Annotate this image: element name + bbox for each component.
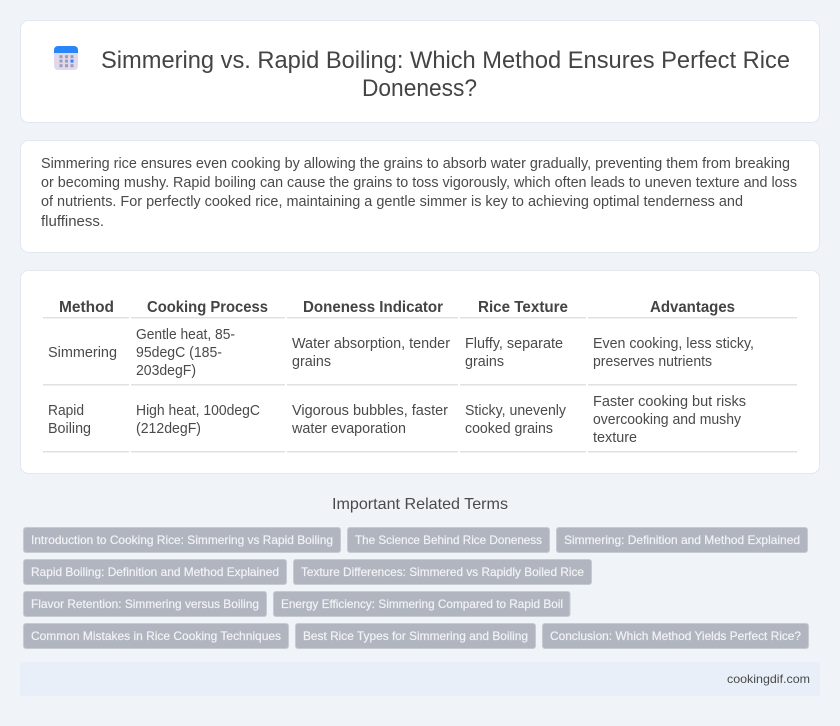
related terms tags: Introduction to Cooking Rice: Simmering vs Rapid Boiling	[31, 533, 333, 547]
table row: rapid boiling: Boiling	[48, 421, 91, 437]
intro panel	[20, 140, 820, 252]
icon: calendar	[54, 46, 78, 70]
table row: rapid boiling: Rapid	[48, 403, 84, 419]
intro paragraph	[41, 156, 797, 230]
table row: simmering: Even cooking, less sticky,	[593, 336, 754, 352]
table row: simmering: Gentle heat, 85-	[136, 327, 235, 343]
table header row: Doneness Indicator	[303, 299, 443, 316]
intro paragraph: or becoming mushy. Rapid boiling can cause the grains to toss vigorously, which often leads to uneven texture and loss	[41, 175, 797, 191]
header panel	[20, 20, 820, 122]
table row: simmering	[43, 327, 797, 386]
table row: simmering: 203degF)	[136, 363, 196, 379]
comparison table panel	[20, 270, 820, 474]
related terms tags: Texture Differences: Simmered vs Rapidly Boiled Rice	[301, 565, 584, 579]
related terms tags: Energy Efficiency: Simmering Compared to Rapid Boil	[281, 597, 563, 611]
related terms tags: Flavor Retention: Simmering versus Boiling	[31, 597, 259, 611]
table row: rapid boiling: cooked grains	[465, 421, 553, 437]
related terms tags: Rapid Boiling: Definition and Method Explained	[31, 565, 279, 579]
table row: rapid boiling: (212degF)	[136, 421, 201, 437]
related terms tags: The Science Behind Rice Doneness	[355, 533, 542, 547]
intro paragraph: Simmering rice ensures even cooking by allowing the grains to absorb water gradually, preventing them from breaking	[41, 156, 790, 172]
related terms tags: Best Rice Types for Simmering and Boiling	[303, 629, 528, 643]
intro paragraph: of nutrients. For perfectly cooked rice, maintaining a gentle simmer is key to achieving optimal tenderness and	[41, 194, 743, 210]
table row: simmering: Water absorption, tender	[292, 336, 450, 352]
table row: rapid boiling: overcooking and mushy	[593, 412, 742, 428]
title: Doneness?	[362, 75, 477, 102]
table row: rapid boiling: Sticky, unevenly	[465, 403, 567, 419]
related terms tags: Simmering: Definition and Method Explained	[564, 533, 800, 547]
related terms heading: Important Related Terms	[332, 496, 508, 513]
table row: simmering: preserves nutrients	[593, 354, 712, 370]
table row: simmering: 95degC (185-	[136, 345, 222, 361]
table header row: Method	[59, 299, 114, 316]
footer bar: cookingdif.com	[727, 672, 810, 686]
table row: rapid boiling: High heat, 100degC	[136, 403, 260, 419]
table row: rapid boiling: Faster cooking but risks	[593, 394, 746, 410]
table header row: Cooking Process	[147, 299, 268, 316]
footer bar	[20, 662, 820, 696]
table row: rapid boiling: water evaporation	[291, 421, 406, 437]
table row: rapid boiling: texture	[593, 430, 637, 446]
table row: simmering: grains	[465, 354, 504, 370]
title: Simmering vs. Rapid Boiling: Which Method Ensures Perfect Rice	[101, 47, 790, 74]
table row: simmering: grains	[292, 354, 331, 370]
table row: simmering: Fluffy, separate	[465, 336, 563, 352]
table header row: Advantages	[650, 299, 735, 316]
related terms tags: Conclusion: Which Method Yields Perfect Rice?	[550, 629, 801, 643]
table header row	[43, 299, 797, 318]
intro paragraph: fluffiness.	[41, 214, 104, 230]
table header row: Rice Texture	[478, 299, 568, 316]
title	[101, 47, 790, 102]
table row: rapid boiling	[43, 394, 797, 452]
related terms tags: Common Mistakes in Rice Cooking Techniques	[31, 629, 281, 643]
related terms tags	[24, 528, 808, 648]
table row: simmering: Simmering	[48, 345, 117, 361]
table row: rapid boiling: Vigorous bubbles, faster	[292, 403, 448, 419]
